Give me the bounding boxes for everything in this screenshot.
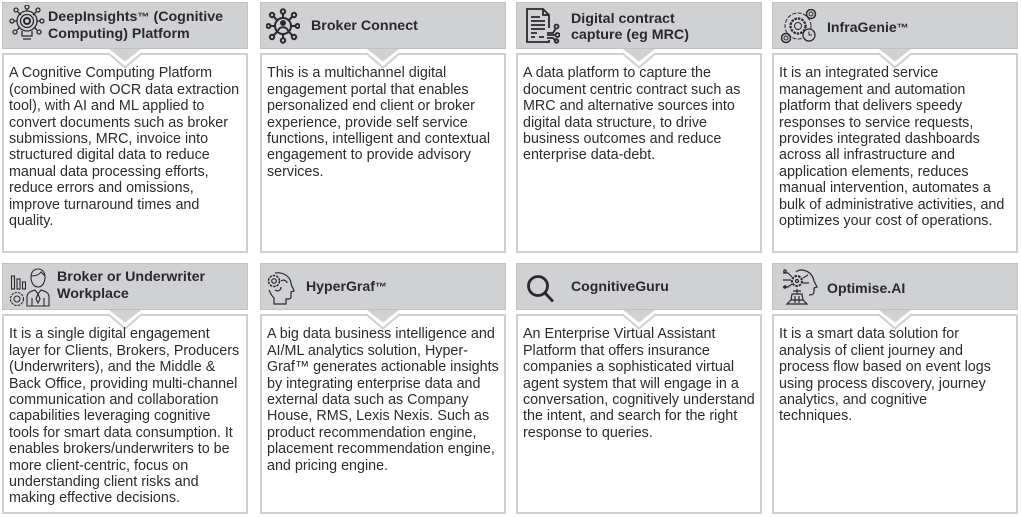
title: HyperGraf™ <box>306 278 387 294</box>
text block: digital data structure, to drive <box>523 115 707 131</box>
text block: responses to service requests, <box>779 115 973 131</box>
text block <box>523 326 755 441</box>
arrow <box>878 49 912 69</box>
icon: document with data nodes <box>526 8 560 44</box>
text block: MRC and alternative sources into <box>523 98 735 114</box>
panel: InfraGenie <box>772 2 1018 253</box>
text block: management and automation <box>779 82 965 98</box>
icon: lightbulb network <box>9 5 45 40</box>
body box <box>260 314 506 514</box>
text block: A data platform to capture the <box>523 65 711 81</box>
header: Broker Connect <box>260 2 506 49</box>
text block: services. <box>267 164 324 180</box>
text block: process flow based on event logs <box>779 359 991 375</box>
title: capture (eg MRC) <box>571 27 689 43</box>
panel: Digital contract capture <box>516 2 762 253</box>
text block: This is a multichannel digital <box>267 65 446 81</box>
text block: improve turnaround times and <box>9 197 199 213</box>
icon: magnifier <box>527 275 554 302</box>
panel: HyperGraf <box>260 263 506 514</box>
title: CognitiveGuru <box>571 278 669 294</box>
icon: gears and clock <box>781 9 816 44</box>
text block <box>779 326 991 424</box>
text block: making effective decisions. <box>9 490 180 506</box>
title <box>57 269 205 302</box>
text block: understanding client risks and <box>9 474 199 490</box>
text block: and pricing engine. <box>267 458 388 474</box>
text block: experience, provide self service <box>267 115 468 131</box>
text block <box>779 65 1004 229</box>
title: Digital contract <box>571 10 675 26</box>
panel: DeepInsights <box>2 2 248 253</box>
body box <box>260 53 506 253</box>
title <box>48 9 223 42</box>
arrow <box>622 49 656 69</box>
text block <box>9 326 239 506</box>
title: Broker or Underwriter <box>57 269 205 285</box>
text block: using process discovery, journey <box>779 376 986 392</box>
text block: across all infrastructure and <box>779 147 955 163</box>
text block: A big data business intelligence and <box>267 326 495 342</box>
text block: A Cognitive Computing Platform <box>9 65 212 81</box>
text block: convert documents such as broker <box>9 115 228 131</box>
text block: analytics, and cognitive <box>779 392 927 408</box>
text block: response to queries. <box>523 425 653 441</box>
body box <box>2 314 248 514</box>
icon: person with bars and gear <box>10 268 50 306</box>
header: DeepInsights <box>2 2 248 49</box>
text block: (Underwriters), and the Middle & <box>9 359 215 375</box>
text block: document centric contract such as <box>523 82 740 98</box>
header: InfraGenie <box>772 2 1018 49</box>
text block: Back Office, providing multi-channel <box>9 376 237 392</box>
title: DeepInsights™ (Cognitive <box>48 9 223 25</box>
text block: functions, intelligent and contextual <box>267 131 490 147</box>
text block: application elements, reduces <box>779 164 969 180</box>
panel: Optimise.AI <box>772 263 1018 514</box>
text block: quality. <box>9 213 53 229</box>
text block: reduce errors and omissions, <box>9 180 194 196</box>
text block: It is an integrated service <box>779 65 938 81</box>
body box <box>516 53 762 253</box>
title: Broker Connect <box>311 18 418 34</box>
text block: enables brokers/underwriters to be <box>9 441 230 457</box>
title: InfraGenie™ <box>827 19 909 35</box>
text block <box>523 65 740 163</box>
arrow <box>108 310 142 330</box>
text block: AI/ML analytics solution, Hyper- <box>267 343 468 359</box>
text block: by integrating enterprise data and <box>267 376 480 392</box>
header: Workplace <box>2 263 248 310</box>
title: Optimise.AI <box>827 280 905 296</box>
text block: engagement to provide advisory <box>267 147 471 163</box>
icon: AI head with circuitry <box>783 269 818 305</box>
text block: business outcomes and reduce <box>523 131 721 147</box>
text block: enterprise data-debt. <box>523 147 655 163</box>
text block: manual intervention, automates a <box>779 180 991 196</box>
text block: techniques. <box>779 408 852 424</box>
text block: bulk of administrative activities, and <box>779 197 1004 213</box>
text block <box>9 65 239 229</box>
text block: (combined with OCR data extraction <box>9 82 239 98</box>
body box <box>772 53 1018 253</box>
text block: platform that delivers speedy <box>779 98 962 114</box>
header: CognitiveGuru <box>516 263 762 310</box>
header: HyperGraf <box>260 263 506 310</box>
text block: engagement portal that enables <box>267 82 469 98</box>
icon: head with gear <box>268 272 295 305</box>
text block: Platform that offers insurance <box>523 343 710 359</box>
text block: structured digital data to reduce <box>9 147 210 163</box>
text block: more client-centric, focus on <box>9 458 188 474</box>
text block: manual data processing efforts, <box>9 164 209 180</box>
text block: optimizes your cost of operations. <box>779 213 992 229</box>
text block: communication and collaboration <box>9 392 218 408</box>
panel: Broker or Underwriter Workplace <box>2 263 248 514</box>
text block: tool), with AI and ML applied to <box>9 98 204 114</box>
icon: broker network <box>266 8 300 44</box>
text block: agent system that will engage in a <box>523 376 739 392</box>
text block: An Enterprise Virtual Assistant <box>523 326 715 342</box>
text block: personalized end client or broker <box>267 98 475 114</box>
text block <box>267 65 490 180</box>
title: Workplace <box>57 286 129 302</box>
body box <box>772 314 1018 514</box>
text block: companies a sophisticated virtual <box>523 359 734 375</box>
text block: analysis of client journey and <box>779 343 963 359</box>
text block: capabilities leveraging cognitive <box>9 408 211 424</box>
header: Digital contract capture <box>516 2 762 49</box>
title: Computing) Platform <box>48 26 190 42</box>
text block: submissions, MRC, invoice into <box>9 131 208 147</box>
header: Optimise.AI <box>772 263 1018 310</box>
text block: product recommendation engine, <box>267 425 476 441</box>
text block: placement recommendation engine, <box>267 441 495 457</box>
text block: tools for smart data consumption. It <box>9 425 233 441</box>
panel: Broker Connect <box>260 2 506 253</box>
text block <box>267 326 499 474</box>
body box <box>2 53 248 253</box>
text block: the intent, and search for the right <box>523 408 737 424</box>
body box <box>516 314 762 514</box>
text block: It is a smart data solution for <box>779 326 959 342</box>
text block: Graf™ generates actionable insights <box>267 359 499 375</box>
text block: House, RMS, Lexis Nexis. Such as <box>267 408 489 424</box>
arrow <box>366 310 400 330</box>
panel: CognitiveGuru <box>516 263 762 514</box>
text block: conversation, cognitively understand <box>523 392 755 408</box>
arrow <box>878 310 912 330</box>
arrow <box>108 49 142 69</box>
text block: provides integrated dashboards <box>779 131 980 147</box>
text block: It is a single digital engagement <box>9 326 210 342</box>
arrow <box>366 49 400 69</box>
text block: layer for Clients, Brokers, Producers <box>9 343 239 359</box>
title <box>571 10 689 43</box>
text block: external data such as Company <box>267 392 469 408</box>
arrow <box>622 310 656 330</box>
